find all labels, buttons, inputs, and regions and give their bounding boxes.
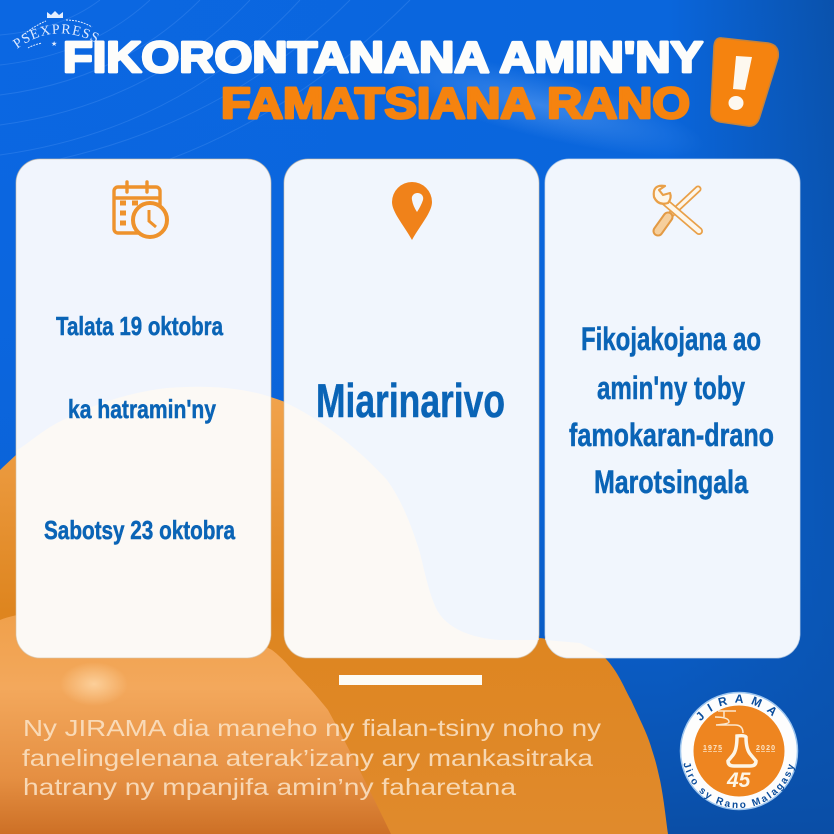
title line 2: FAMATSIANA RANO [221, 79, 690, 128]
logo: JIRAMA: Jiro sy Rano Malagasy [684, 762, 796, 808]
divider bar [339, 675, 482, 685]
date text: start: Talata 19 oktobra [56, 311, 223, 341]
watermark: PSEXPRESS stamp [12, 11, 99, 49]
panel: dates [16, 159, 271, 658]
work text line 4: Marotsingala [594, 464, 748, 500]
logo: JIRAMA: JIRAMA [696, 694, 776, 720]
panel: work [545, 159, 800, 658]
logo: JIRAMA: 1975 [703, 745, 722, 752]
work text line 2: amin'ny toby [597, 370, 745, 406]
work text line 1: Fikojakojana ao [581, 321, 761, 357]
date text: until: ka hatramin'ny [68, 394, 216, 424]
logo: JIRAMA: 2020 [756, 745, 775, 752]
work text line 3: famokaran-drano [569, 417, 774, 453]
watermark: PSEXPRESS stamp: PSEXPRESS [12, 24, 99, 49]
icon: calendar with clock [114, 182, 167, 237]
watermark: PSEXPRESS stamp: ★ [51, 40, 57, 48]
date text: end: Sabotsy 23 oktobra [44, 515, 235, 545]
message text [22, 715, 602, 800]
logo: JIRAMA [680, 692, 798, 810]
orange back wave [0, 387, 668, 834]
icon: exclamation badge [711, 38, 778, 126]
location name: Miarinarivo [316, 374, 505, 427]
panel: location [284, 159, 539, 658]
icon: wrench and screwdriver [654, 186, 699, 231]
message text: fanelingelenana aterak’izany ary mankasitraka [22, 745, 593, 771]
message text: Ny JIRAMA dia maneho ny fialan-tsiny noho ny [23, 715, 602, 741]
icon: location pin [392, 182, 432, 240]
orange front wave [0, 610, 391, 834]
title line 1: FIKORONTANANA AMIN'NY [63, 33, 703, 82]
message text: hatrany ny mpanjifa amin’ny faharetana [23, 774, 516, 800]
highlight on front wave [60, 662, 128, 706]
logo: JIRAMA: 45 [726, 769, 751, 792]
